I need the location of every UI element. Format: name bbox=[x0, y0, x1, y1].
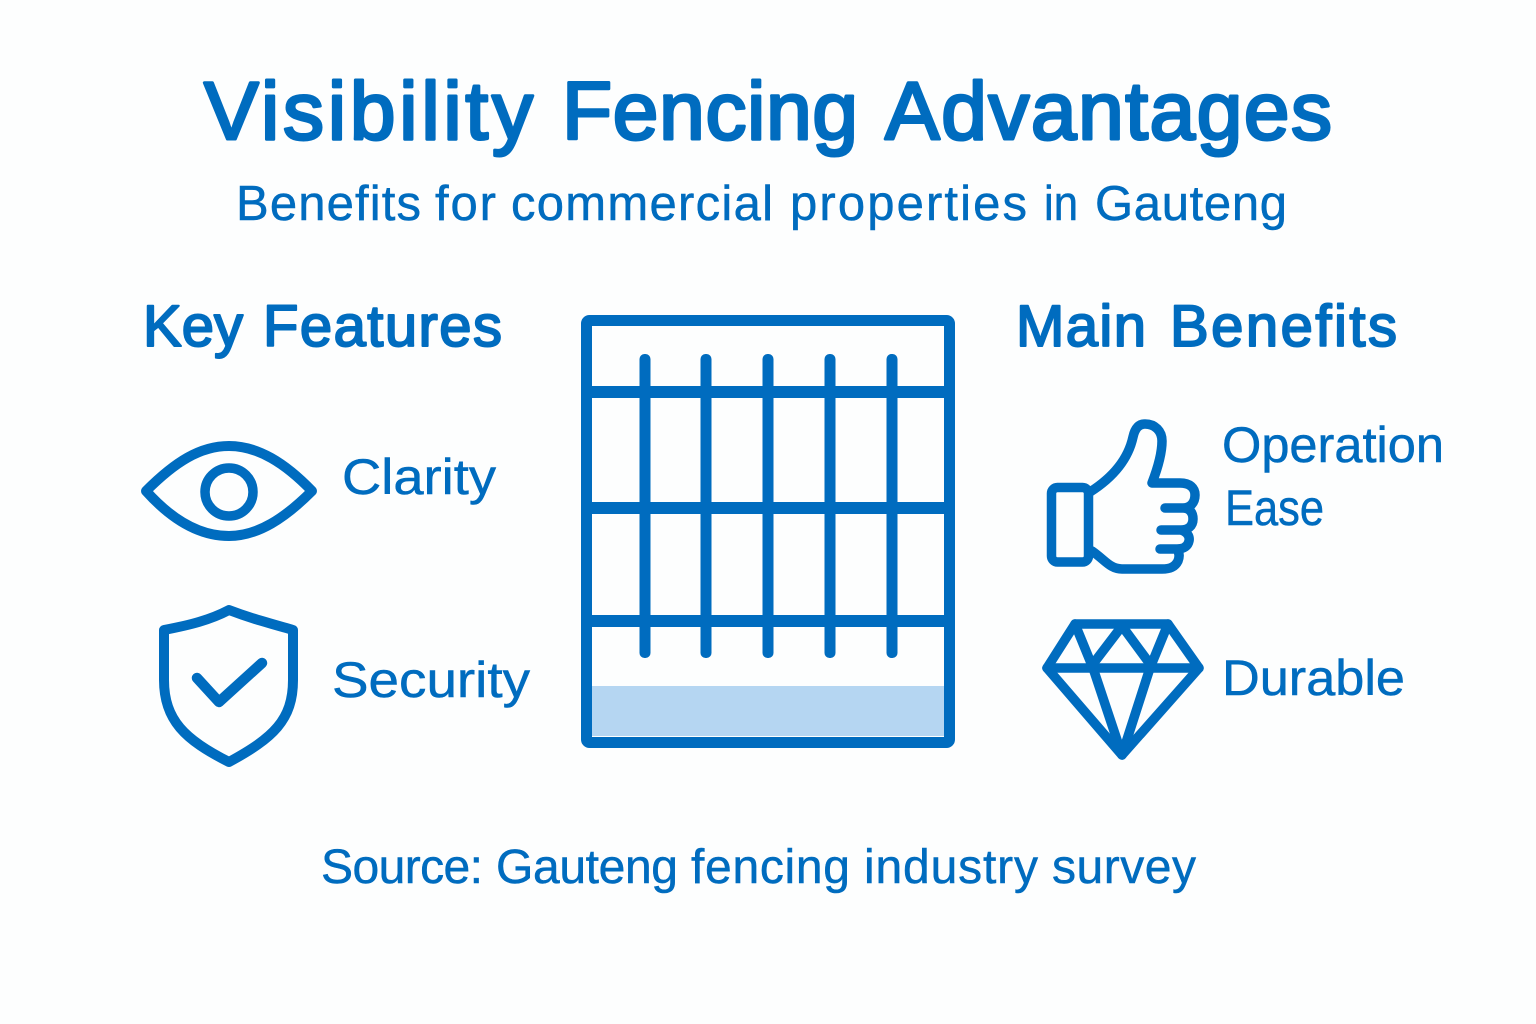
heading: key features bbox=[143, 294, 502, 359]
panel: key features bbox=[143, 294, 530, 762]
icon: shield with check bbox=[164, 610, 293, 762]
source note: fencing bbox=[691, 841, 850, 894]
icon: diamond bbox=[1047, 624, 1199, 755]
subtitle: Benefits bbox=[236, 177, 421, 231]
label: operation ease bbox=[1222, 417, 1444, 536]
subtitle: properties bbox=[790, 177, 1027, 231]
source note: industry bbox=[864, 841, 1038, 894]
title: Fencing bbox=[562, 66, 858, 157]
title: Advantages bbox=[885, 66, 1332, 157]
subtitle: in bbox=[1044, 177, 1078, 231]
source note: Gauteng bbox=[496, 841, 678, 894]
label: operation ease: Operation bbox=[1222, 417, 1444, 473]
source note bbox=[321, 841, 1196, 894]
heading: main benefits: Main bbox=[1016, 294, 1146, 359]
title: Visibility bbox=[204, 66, 533, 157]
source note: Source: bbox=[321, 841, 483, 894]
heading: main benefits: Benefits bbox=[1170, 294, 1397, 359]
heading: key features: Features bbox=[263, 294, 502, 359]
label: operation ease: Ease bbox=[1225, 480, 1324, 536]
subtitle: Gauteng bbox=[1095, 177, 1287, 231]
label: durable: Durable bbox=[1222, 650, 1405, 706]
icon: eye bbox=[146, 446, 312, 536]
subtitle: commercial bbox=[511, 177, 773, 231]
subtitle: for bbox=[435, 177, 496, 231]
icon: thumbs up bbox=[1052, 424, 1195, 569]
label: clarity: Clarity bbox=[342, 449, 496, 505]
illustration: fence bbox=[586, 320, 950, 742]
panel: main benefits bbox=[1016, 294, 1444, 755]
subtitle bbox=[236, 177, 1287, 231]
source note: survey bbox=[1052, 841, 1196, 894]
heading: main benefits bbox=[1016, 294, 1397, 359]
label: security: Security bbox=[332, 652, 530, 708]
title bbox=[204, 66, 1332, 157]
heading: key features: Key bbox=[143, 294, 243, 359]
